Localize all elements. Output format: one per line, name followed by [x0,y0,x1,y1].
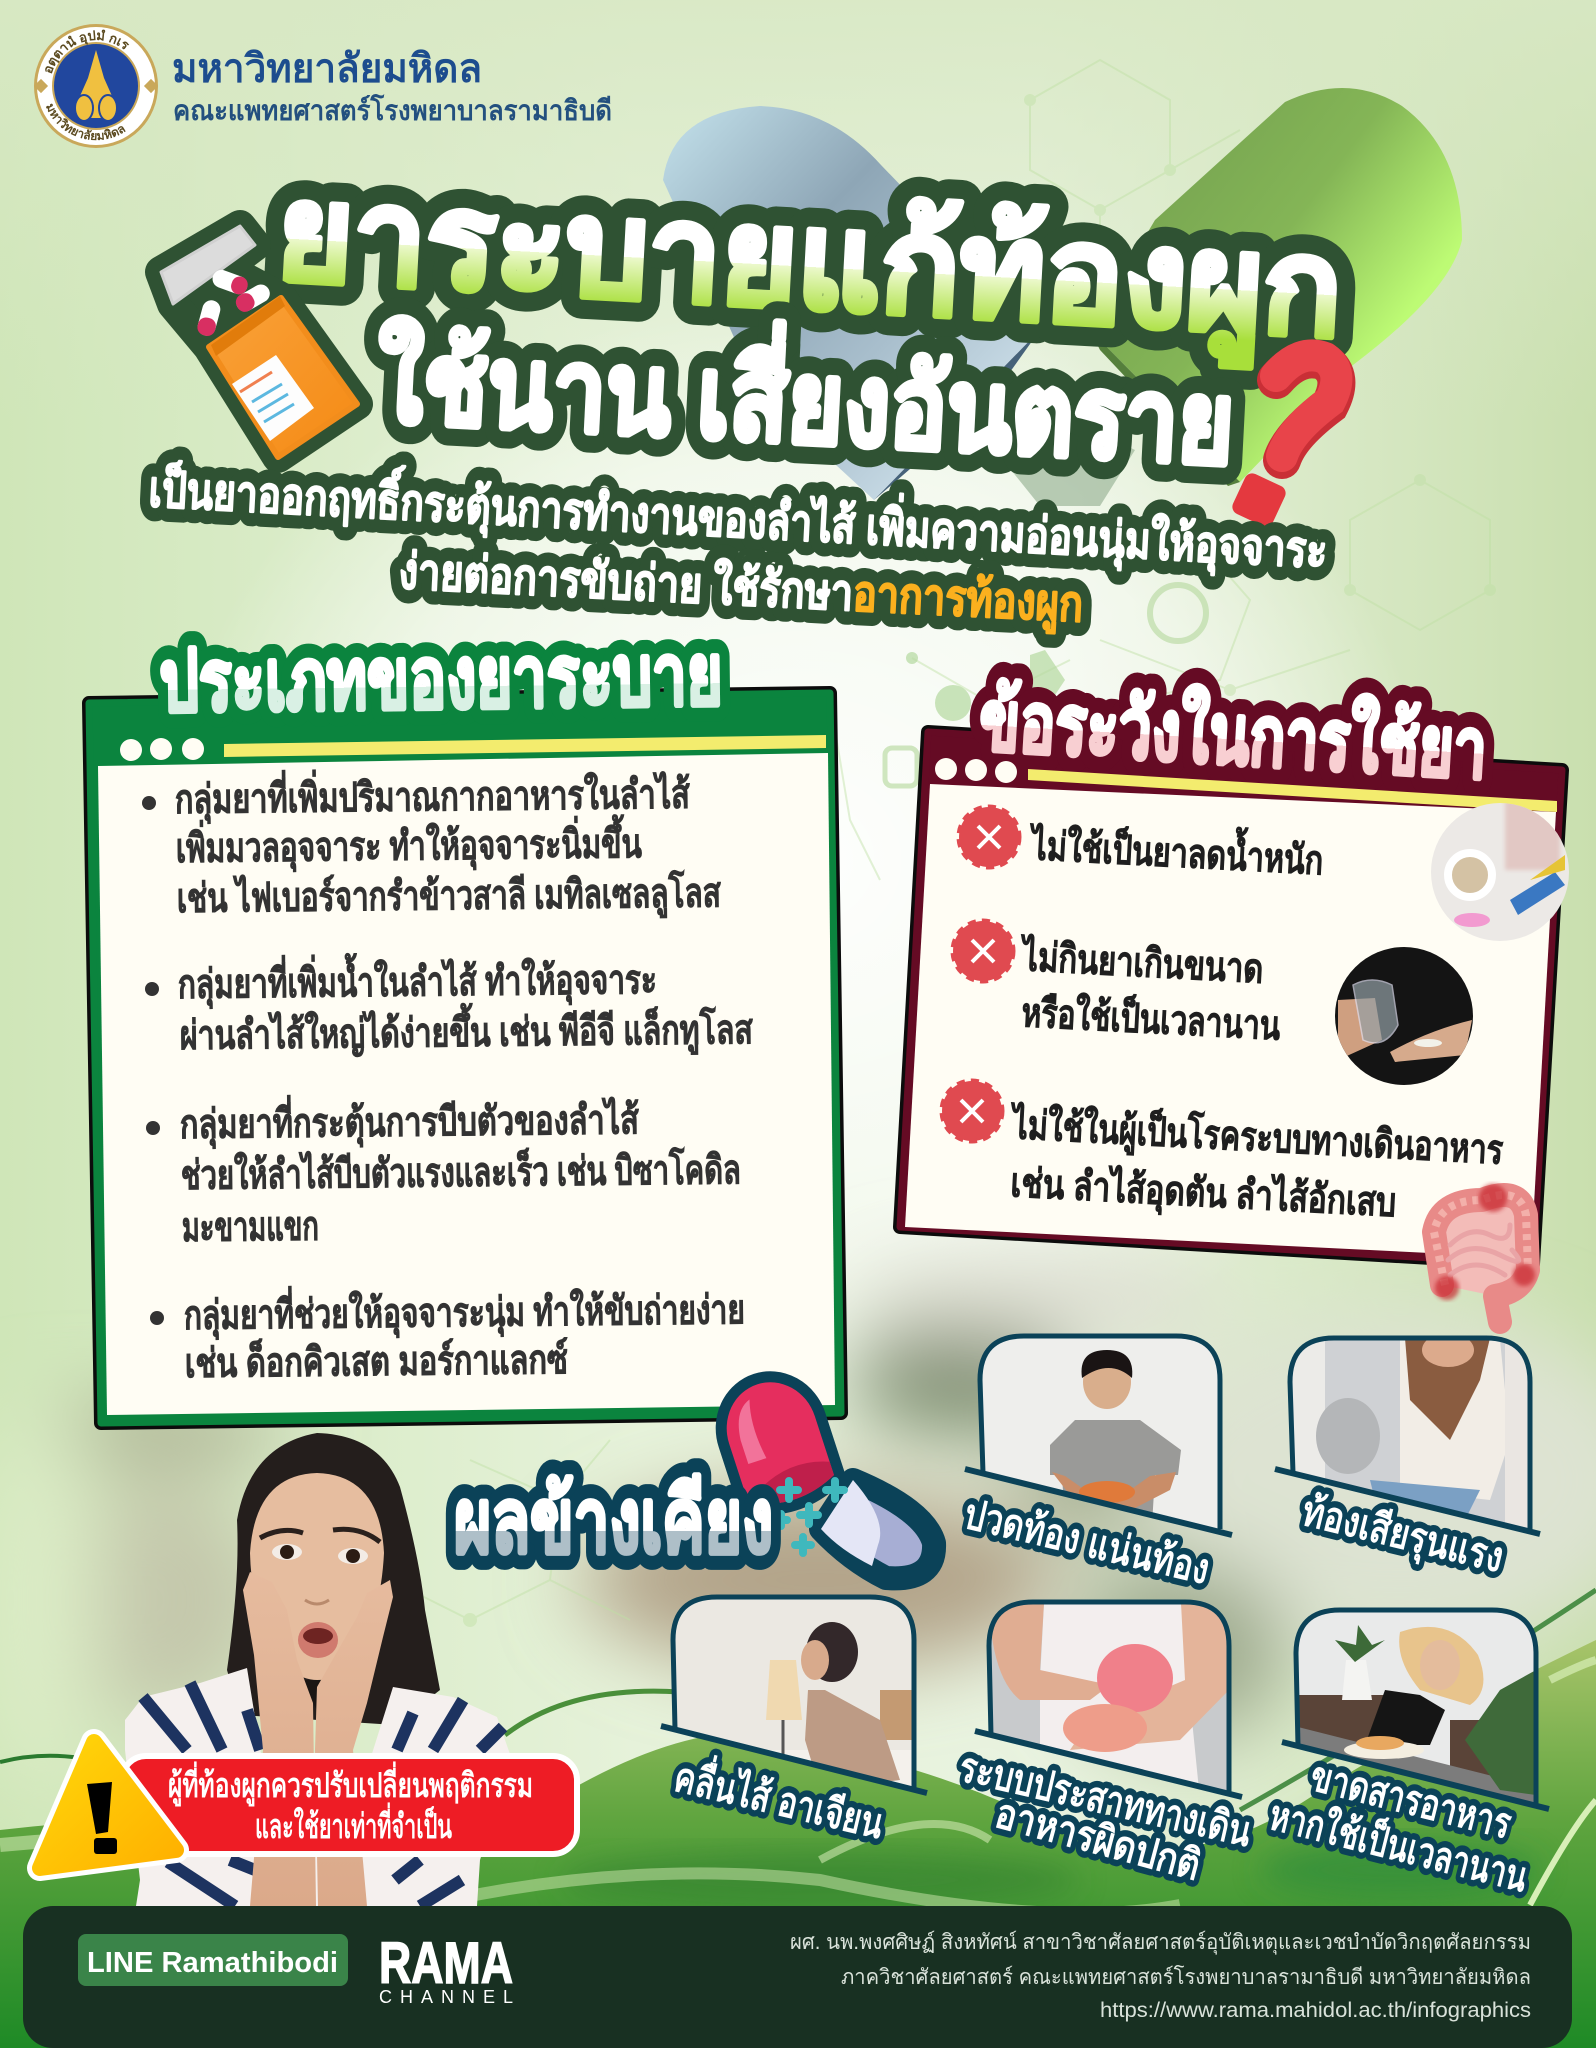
label: ขาดสารอาหาร [1306,1752,1516,1847]
heading: laxative types [159,627,723,730]
icon: medicine bottle [161,226,357,457]
item 3 [1008,1099,1505,1228]
faded medical icons [885,443,1206,786]
heading: side effects [454,1370,934,1578]
bullets [142,796,164,1325]
item 2 [1018,933,1282,1049]
card: malnutrition [1265,1605,1549,1901]
panel: laxative types [89,627,841,1423]
label: ปวดท้อง แน่นท้อง [960,1490,1214,1593]
warning text [168,1761,533,1846]
LINE badge [78,1934,348,1986]
title line 2: ใช้นาน เสี่ยงอันตราย [374,301,1238,488]
item 3: เช่น ลำไส้อุดตัน ลำไส้อักเสบ [1009,1159,1397,1228]
logo: มหาวิทยาลัยมหิดล [46,104,126,140]
credit text: ผศ. นพ.พงศศิษฏ์ สิงหทัศน์ สาขาวิชาศัลยศาสตร์อุบัติเหตุและเวชบำบัดวิกฤตศัลยกรรม [790,1930,1531,1955]
credit text: ภาควิชาศัลยศาสตร์ คณะแพทยศาสตร์โรงพยาบาลรามาธิบดี มหาวิทยาลัยมหิดล [841,1965,1531,1989]
warning text: ผู้ที่ท้องผูกควรปรับเปลี่ยนพฤติกรรม [168,1761,533,1807]
bullet text 2: กลุ่มยาที่เพิ่มน้ำในลำไส้ ทำให้อุจจาระ [178,950,657,1010]
item 2: ไม่กินยาเกินขนาด [1018,933,1265,992]
card: severe diarrhea [1275,1330,1540,1584]
heading: laxative types: ประเภทของยาระบาย [159,627,723,730]
card: abdominal pain [960,1330,1232,1593]
subtitle line 1 [147,451,1329,582]
icon: capsule red half [714,1370,837,1513]
warning text: และใช้ยาเท่าที่จำเป็น [255,1802,452,1846]
title [273,158,1346,488]
bullet text 4: กลุ่มยาที่ช่วยให้อุจจาระนุ่ม ทำให้ขับถ่ายง่าย [184,1281,745,1341]
photo: hand with pills [1335,947,1475,1087]
logo [34,24,158,148]
title line 1: ยาระบายแก้ท้องผูก [273,158,1346,374]
card: nausea [661,1590,927,1847]
bottom green waves [0,1590,1596,2048]
bullet text 1 [175,766,722,923]
credit text: https://www.rama.mahidol.ac.th/infographics [1100,1999,1531,2022]
header: university name [172,47,612,126]
icon: inflamed intestines [1434,1184,1535,1322]
card: digestive disorder [955,1598,1256,1889]
bullet text 1: กลุ่มยาที่เพิ่มปริมาณกากอาหารในลำไส้ [175,766,691,825]
item 2: หรือใช้เป็นเวลานาน [1021,987,1282,1049]
subtitle line 2: ง่ายต่อการขับถ่าย ใช้รักษาอาการท้องผูก [397,542,1084,635]
big green capsule [1090,88,1462,486]
RAMA channel logo [379,1931,513,2007]
bullet text 3: ช่วยให้ลำไส้บีบตัวแรงและเร็ว เช่น บิซาโคดิล [181,1144,741,1198]
hair [227,1433,440,1725]
icon: sparkles [775,1481,844,1553]
label: ท้องเสียรุนแรง [1297,1487,1508,1584]
neck shadow [300,1680,335,1712]
bullet text 1: เพิ่มมวลอุจจาระ ทำให้อุจจาระนิ่มขึ้น [176,814,642,874]
bullet text 4 [184,1281,745,1386]
icon: x badge 3 [942,1081,1002,1141]
icon: question mark [1230,355,1336,529]
logo: อตฺตานํ อุปมํ กเร [45,30,130,74]
big blue capsule [663,106,1040,500]
bullet text 1: เช่น ไฟเบอร์จากรำข้าวสาลี เมทิลเซลลูโลส [177,869,722,923]
right hand and arm [315,1580,393,1906]
subtitle line 2: ง่ายต่อการขับถ่าย ใช้รักษาอาการท้องผูก [397,542,1084,635]
heading: laxative types: ประเภทของยาระบาย [159,627,723,730]
icon: x badge 1 [959,807,1019,867]
label: คลื่นไส้ อาเจียน [670,1747,890,1847]
face features [260,1529,380,1658]
subtitle [147,451,1329,635]
title line 1: ยาระบายแก้ท้องผูก [273,158,1346,374]
photo [1292,1340,1528,1528]
shirt [125,1668,512,1906]
bullet text 2 [178,950,754,1060]
title line 2: ใช้นาน เสี่ยงอันตราย [374,301,1238,488]
label [1265,1752,1533,1901]
face [250,1473,384,1680]
shirt stripes [143,1683,503,1906]
photo [670,1590,920,1800]
photo [985,1598,1235,1800]
label: ระบบประสาททางเดิน [955,1743,1256,1855]
bullet text 3: กลุ่มยาที่กระตุ้นการบีบตัวของลำไส้ [180,1091,640,1150]
bullet text 3 [180,1091,741,1250]
icon: warning triangle [40,1742,176,1868]
icon: capsule blue half [821,1480,934,1578]
heading text: ผลข้างเคียง [454,1472,773,1572]
footer bar [23,1906,1572,2048]
item 1: ไม่ใช้เป็นยาลดน้ำหนัก [1027,816,1325,883]
credit text [790,1930,1531,2022]
label: อาหารผิดปกติ [991,1789,1206,1889]
RAMA channel logo: RAMA [379,1931,513,1996]
panel: precautions [900,672,1570,1322]
woman photo [125,1433,512,1906]
bullet text 2: ผ่านลำไส้ใหญ่ได้ง่ายขึ้น เช่น พีอีจี แล็กทูโลส [180,1000,754,1060]
bullet text 4: เช่น ด็อกคิวเสต มอร์กาแลกซ์ [185,1334,568,1386]
LINE badge: LINE Ramathibodi [87,1947,338,1979]
photo [982,1338,1218,1528]
photo: pills and tape [1430,800,1570,943]
heading text: ผลข้างเคียง [454,1472,773,1572]
photo [1290,1605,1540,1815]
RAMA channel logo: CHANNEL [379,1987,513,2007]
header: university name: คณะแพทยศาสตร์โรงพยาบาลรามาธิบดี [173,93,612,126]
left hand and arm [243,1572,316,1906]
molecule pattern [410,60,1496,1627]
callout: warning [40,1742,577,1868]
bullet text 3: มะขามแขก [182,1205,319,1250]
icon: x badge 2 [953,921,1013,981]
header: university name: มหาวิทยาลัยมหิดล [172,47,482,91]
